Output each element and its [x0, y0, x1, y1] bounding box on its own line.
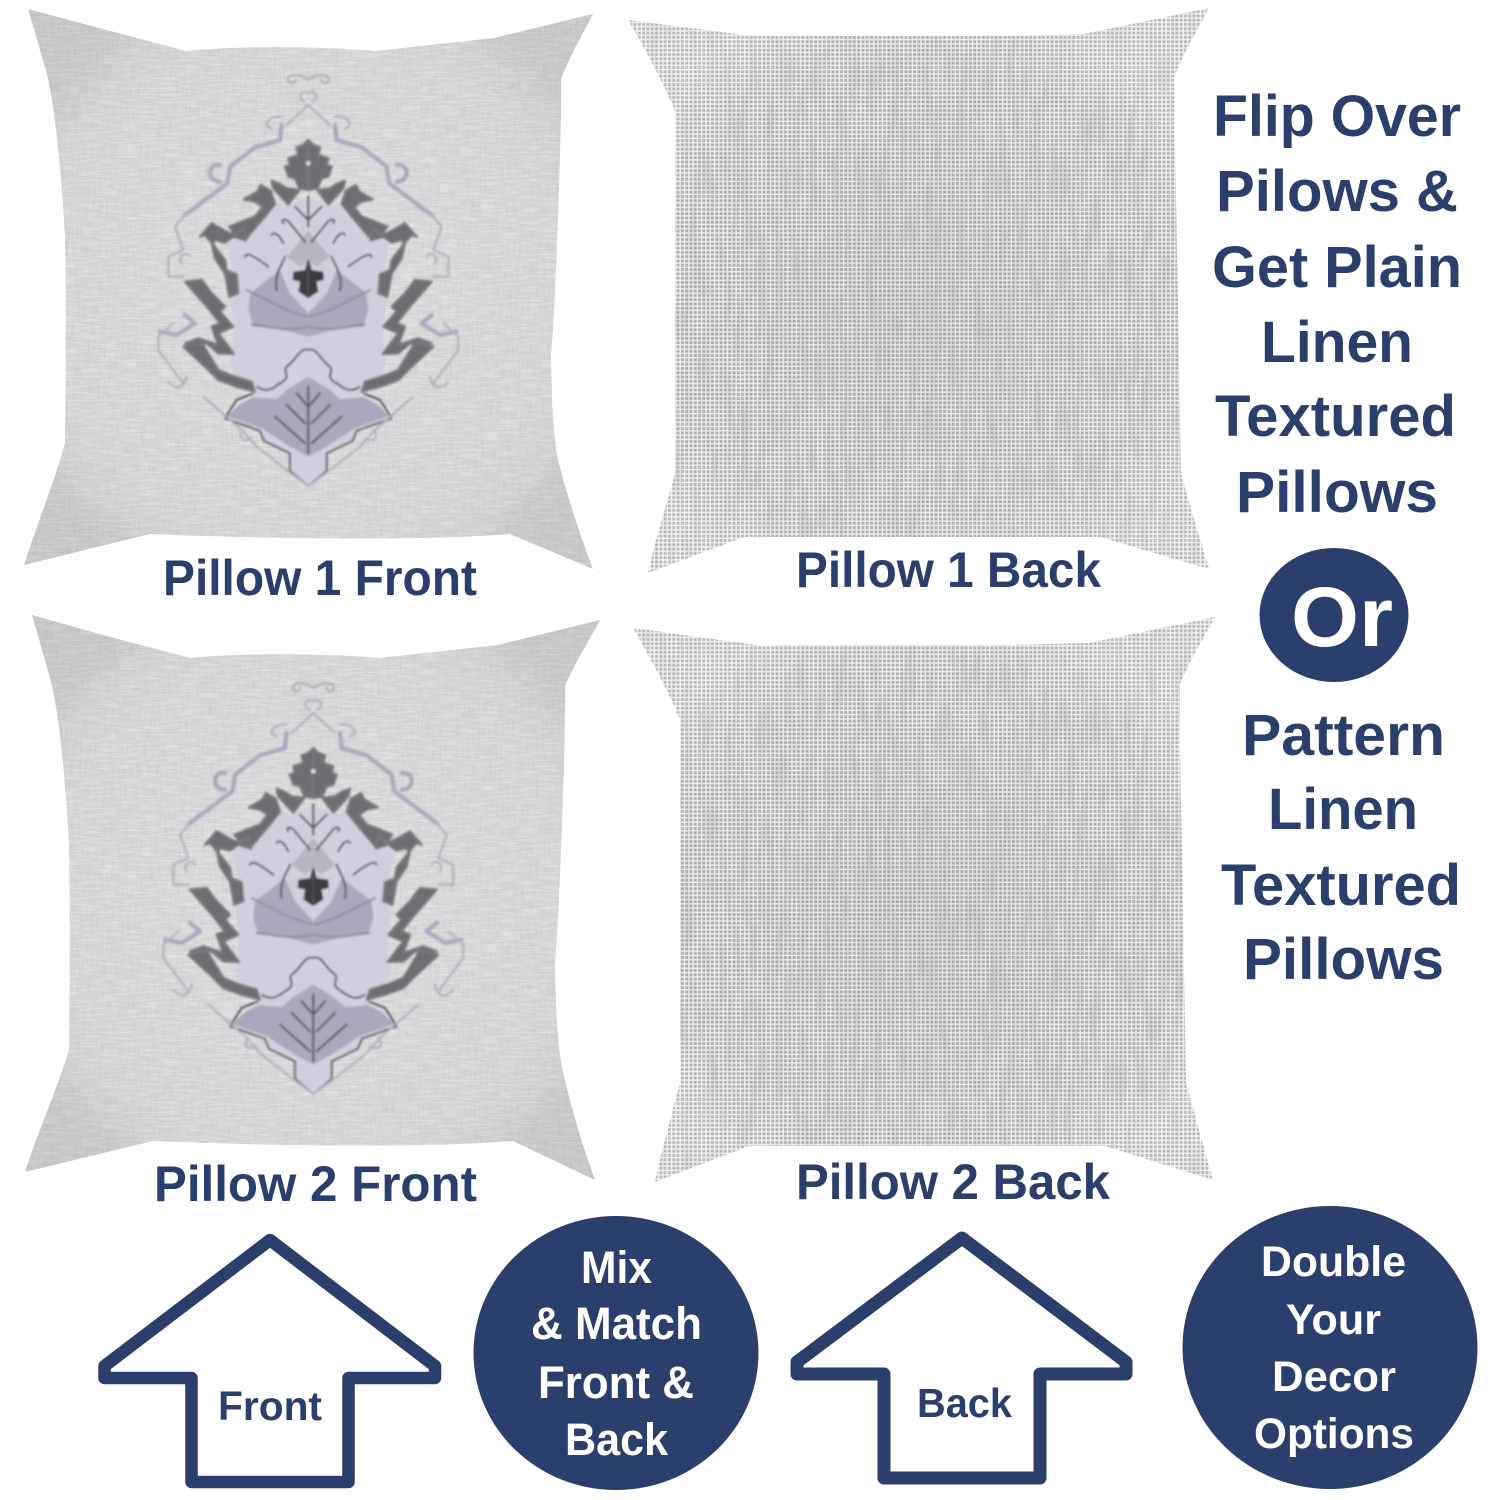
text block: flip over plain: Flip Over — [1213, 84, 1461, 149]
text block: pattern linen: Linen — [1268, 777, 1418, 842]
label: pillow 1 front: Pillow 1 Front — [163, 550, 477, 606]
text block: flip over plain — [1212, 84, 1462, 525]
text block: flip over plain: Linen — [1261, 310, 1413, 375]
badge: double your decor options: Options — [1254, 1410, 1414, 1458]
badge: mix and match: & Match — [531, 1298, 702, 1349]
badge: or — [1260, 548, 1408, 682]
text block: pattern linen — [1221, 703, 1461, 992]
badge: or: Or — [1291, 570, 1393, 664]
badge: double your decor options — [1182, 1206, 1478, 1489]
label: pillow 1 back: Pillow 1 Back — [796, 542, 1101, 598]
text block: pattern linen: Textured — [1221, 853, 1461, 918]
badge: double your decor options: Your — [1286, 1296, 1381, 1344]
badge: mix and match: Mix — [581, 1242, 652, 1293]
badge: double your decor options: Double — [1261, 1238, 1406, 1286]
arrow: front — [104, 1240, 435, 1482]
pillow 2 back — [633, 617, 1215, 1182]
text block: pattern linen: Pillows — [1243, 927, 1444, 992]
badge: mix and match: Back — [565, 1414, 669, 1465]
arrow: front: Front — [218, 1383, 322, 1429]
text block: flip over plain: Get Plain — [1212, 235, 1462, 300]
text block: flip over plain: Pilows & — [1216, 159, 1458, 224]
text block: pattern linen: Pattern — [1242, 703, 1445, 768]
label: pillow 2 front: Pillow 2 Front — [154, 1156, 477, 1212]
badge: mix and match: Front & — [538, 1357, 694, 1408]
arrow: back — [797, 1238, 1126, 1478]
badge: mix and match — [474, 1216, 758, 1490]
label: pillow 2 back: Pillow 2 Back — [796, 1154, 1110, 1210]
pillow 1 back — [628, 8, 1209, 573]
pillow 1 front — [24, 9, 593, 569]
pattern: pillow 1 motif — [158, 75, 458, 486]
pattern: pillow 2 motif — [163, 683, 463, 1094]
text block: flip over plain: Pillows — [1236, 460, 1438, 525]
badge: double your decor options: Decor — [1272, 1353, 1396, 1401]
pillow 2 front — [25, 615, 600, 1180]
arrow: back: Back — [917, 1380, 1012, 1426]
text block: flip over plain: Textured — [1215, 384, 1456, 449]
